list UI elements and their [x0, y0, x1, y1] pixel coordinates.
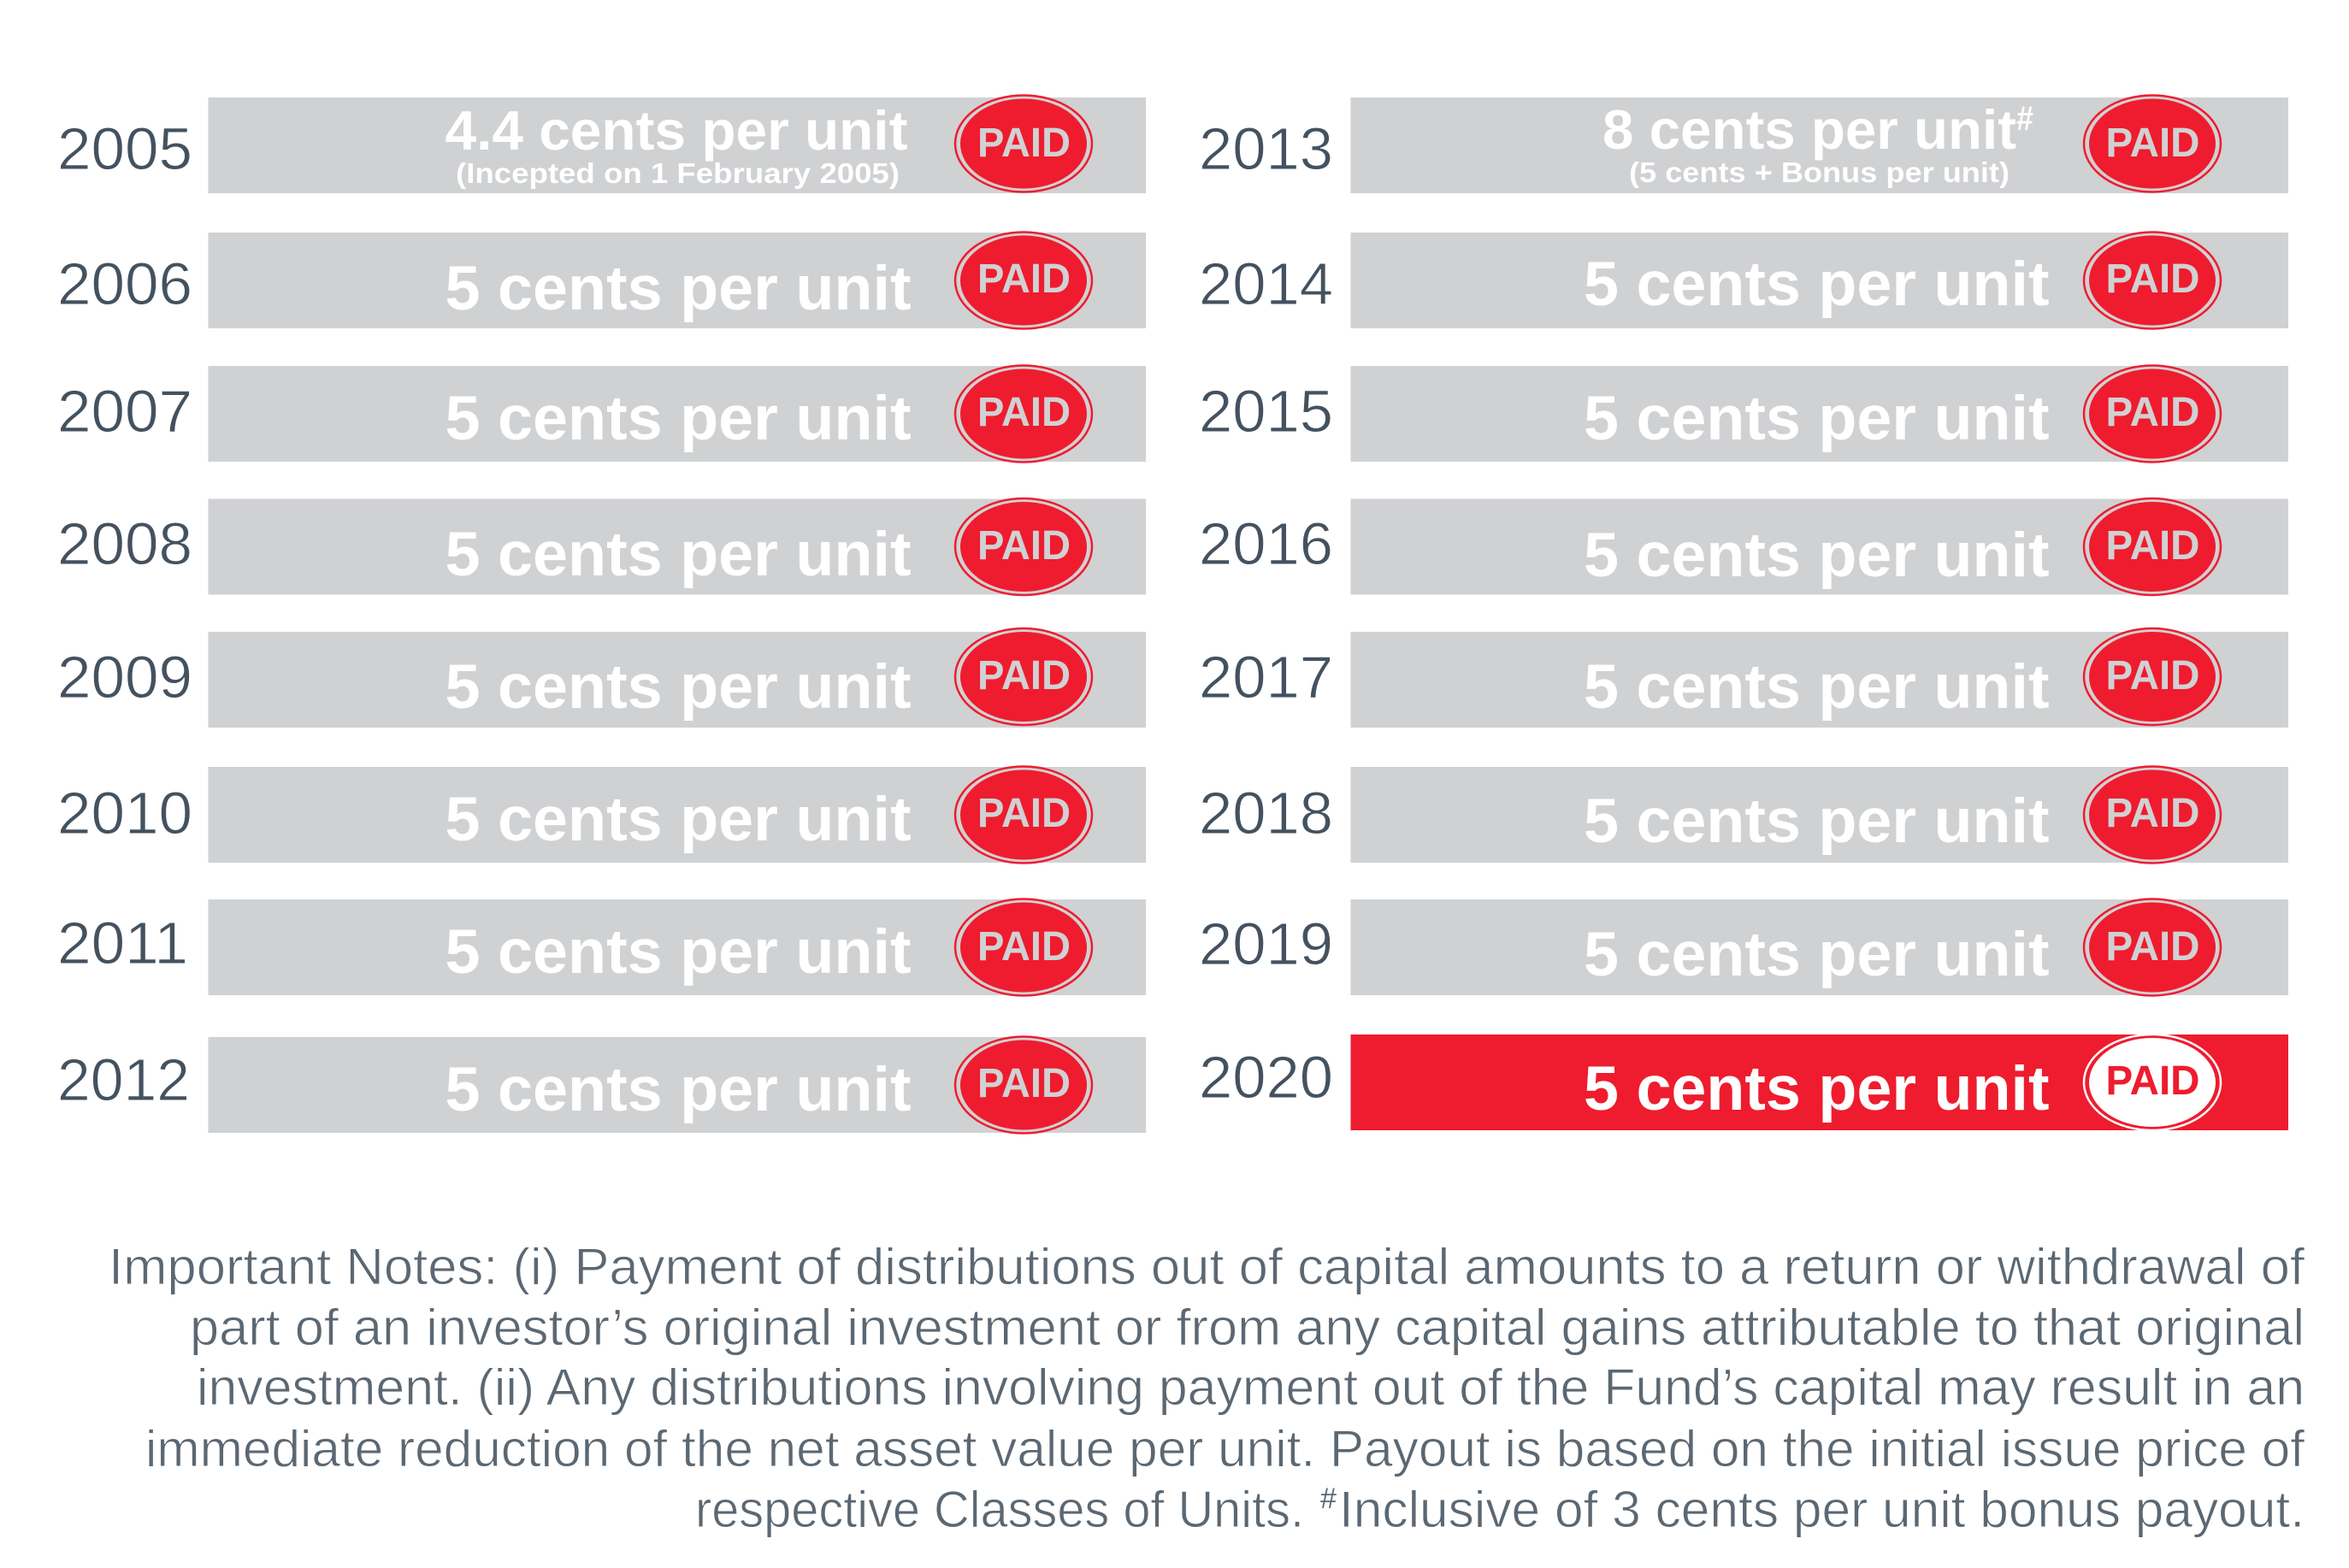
badge: paid 2008: PAID	[977, 523, 1071, 569]
row: 2007	[57, 366, 1146, 462]
badge: paid 2010: PAID	[977, 791, 1071, 836]
row: 2014	[1199, 233, 2288, 328]
amount: 2013	[1602, 98, 2033, 188]
row: 2011	[57, 899, 1146, 995]
badge: paid 2006	[955, 233, 1092, 328]
badge: paid 2019	[2084, 899, 2221, 995]
badge: paid 2015: PAID	[2105, 390, 2199, 435]
bar: 2006	[209, 233, 1146, 328]
important notes: investment. (ii) Any distributions involving payment out of the Fund’s capital may result in an	[197, 1359, 2305, 1416]
badge: paid 2012	[955, 1036, 1092, 1134]
bar: 2008	[209, 499, 1146, 595]
row: 2017	[1199, 628, 2288, 728]
amount: 2014: 5 cents per unit	[1584, 250, 2049, 319]
badge: paid 2020	[2084, 1035, 2221, 1130]
badge: paid 2013: PAID	[2105, 121, 2199, 166]
important notes: respective Classes of Units.	[695, 1481, 1304, 1538]
badge: paid 2005: PAID	[977, 121, 1071, 166]
amount: 2012: 5 cents per unit	[445, 1055, 912, 1124]
badge: paid 2019: PAID	[2105, 924, 2199, 970]
amount: 2015: 5 cents per unit	[1584, 384, 2049, 453]
badge: paid 2018	[2084, 766, 2221, 864]
row: 2009	[57, 628, 1146, 728]
badge: paid 2011: PAID	[977, 924, 1071, 970]
amount: 2008: 5 cents per unit	[445, 520, 912, 589]
bar: 2012	[209, 1037, 1146, 1133]
badge: paid 2016: PAID	[2105, 523, 2199, 569]
row: 2010	[57, 766, 1146, 864]
amount: 2019: 5 cents per unit	[1584, 920, 2049, 989]
bar: 2015	[1351, 366, 2288, 462]
amount: 2006: 5 cents per unit	[445, 254, 912, 323]
important notes	[109, 1238, 2305, 1538]
bar: 2011	[209, 899, 1146, 995]
important notes: Inclusive of 3 cents per unit bonus payout.	[1339, 1481, 2305, 1538]
badge: paid 2010	[955, 766, 1092, 864]
badge: paid 2018: PAID	[2105, 791, 2199, 836]
row: 2020 highlighted	[1199, 1035, 2288, 1130]
year: 2012: 2012	[57, 1046, 190, 1113]
year: 2007: 2007	[57, 378, 192, 445]
year: 2011: 2011	[57, 910, 188, 976]
badge: paid 2013	[2084, 96, 2221, 192]
bar: 2019	[1351, 899, 2288, 995]
badge: paid 2008	[955, 498, 1092, 595]
year: 2010: 2010	[57, 780, 192, 846]
important notes: immediate reduction of the net asset value per unit. Payout is based on the initial issue price of	[145, 1420, 2305, 1477]
year: 2020: 2020	[1199, 1044, 1333, 1111]
badge: paid 2014	[2084, 233, 2221, 328]
bar: 2014	[1351, 233, 2288, 328]
amount: 2017: 5 cents per unit	[1584, 652, 2049, 722]
amount: 2007: 5 cents per unit	[445, 384, 912, 453]
year: 2016: 2016	[1199, 510, 1333, 577]
amount: 2005: 4.4 cents per unit	[445, 99, 908, 162]
row: 2005	[57, 96, 1146, 193]
important notes: #	[1320, 1483, 1337, 1515]
badge: paid 2009	[955, 628, 1092, 725]
badge: paid 2007: PAID	[977, 390, 1071, 435]
row: 2013	[1199, 96, 2288, 193]
bar: 2009	[209, 632, 1146, 728]
amount: 2005	[445, 99, 908, 189]
amount: 2009: 5 cents per unit	[445, 652, 912, 722]
row: 2019	[1199, 899, 2288, 995]
badge: paid 2020: PAID	[2105, 1058, 2199, 1104]
year: 2014: 2014	[1199, 251, 1333, 317]
badge: paid 2017: PAID	[2105, 653, 2199, 699]
year: 2018: 2018	[1199, 780, 1333, 846]
bar: 2007	[209, 366, 1146, 462]
important notes: part of an investor’s original investment or from any capital gains attributable to that original	[190, 1299, 2305, 1356]
badge: paid 2012: PAID	[977, 1061, 1071, 1106]
row: 2015	[1199, 366, 2288, 462]
row: 2018	[1199, 766, 2288, 864]
amount: 2013: #	[2016, 100, 2033, 138]
badge: paid 2017	[2084, 628, 2221, 725]
row: 2006	[57, 233, 1146, 328]
row: 2012	[57, 1036, 1146, 1134]
amount: 2020: 5 cents per unit	[1584, 1054, 2049, 1123]
year: 2005: 2005	[57, 115, 192, 182]
year: 2009: 2009	[57, 644, 192, 710]
badge: paid 2007	[955, 366, 1092, 462]
amount: 2010: 5 cents per unit	[445, 785, 912, 854]
bar: 2017	[1351, 632, 2288, 728]
year: 2017: 2017	[1199, 644, 1333, 710]
year: 2019: 2019	[1199, 911, 1333, 977]
important notes: Important Notes: (i) Payment of distributions out of capital amounts to a return or withdrawal of	[109, 1238, 2305, 1295]
amount: 2018: 5 cents per unit	[1584, 787, 2049, 856]
badge: paid 2015	[2084, 366, 2221, 462]
amount: 2011: 5 cents per unit	[445, 917, 912, 987]
year: 2008: 2008	[57, 510, 192, 577]
year: 2013: 2013	[1199, 115, 1333, 182]
row: 2008	[57, 498, 1146, 595]
badge: paid 2014: PAID	[2105, 256, 2199, 302]
year: 2015: 2015	[1199, 378, 1333, 445]
badge: paid 2011	[955, 899, 1092, 995]
row: 2016	[1199, 498, 2288, 595]
badge: paid 2009: PAID	[977, 653, 1071, 699]
badge: paid 2016	[2084, 498, 2221, 595]
bar: 2010	[209, 767, 1146, 863]
year: 2006: 2006	[57, 251, 192, 317]
bar: 2018	[1351, 767, 2288, 863]
amount: 2013: 8 cents per unit	[1602, 98, 2016, 161]
bar: 2005	[209, 97, 1146, 193]
bar: 2016	[1351, 499, 2288, 595]
amount: 2013: (5 cents + Bonus per unit)	[1629, 156, 2010, 188]
amount: 2005: (Incepted on 1 February 2005)	[456, 157, 900, 189]
amount: 2016: 5 cents per unit	[1584, 521, 2049, 590]
bar: 2020	[1351, 1035, 2288, 1130]
badge: paid 2006: PAID	[977, 256, 1071, 302]
bar: 2013	[1351, 97, 2288, 193]
badge: paid 2005	[955, 96, 1092, 192]
